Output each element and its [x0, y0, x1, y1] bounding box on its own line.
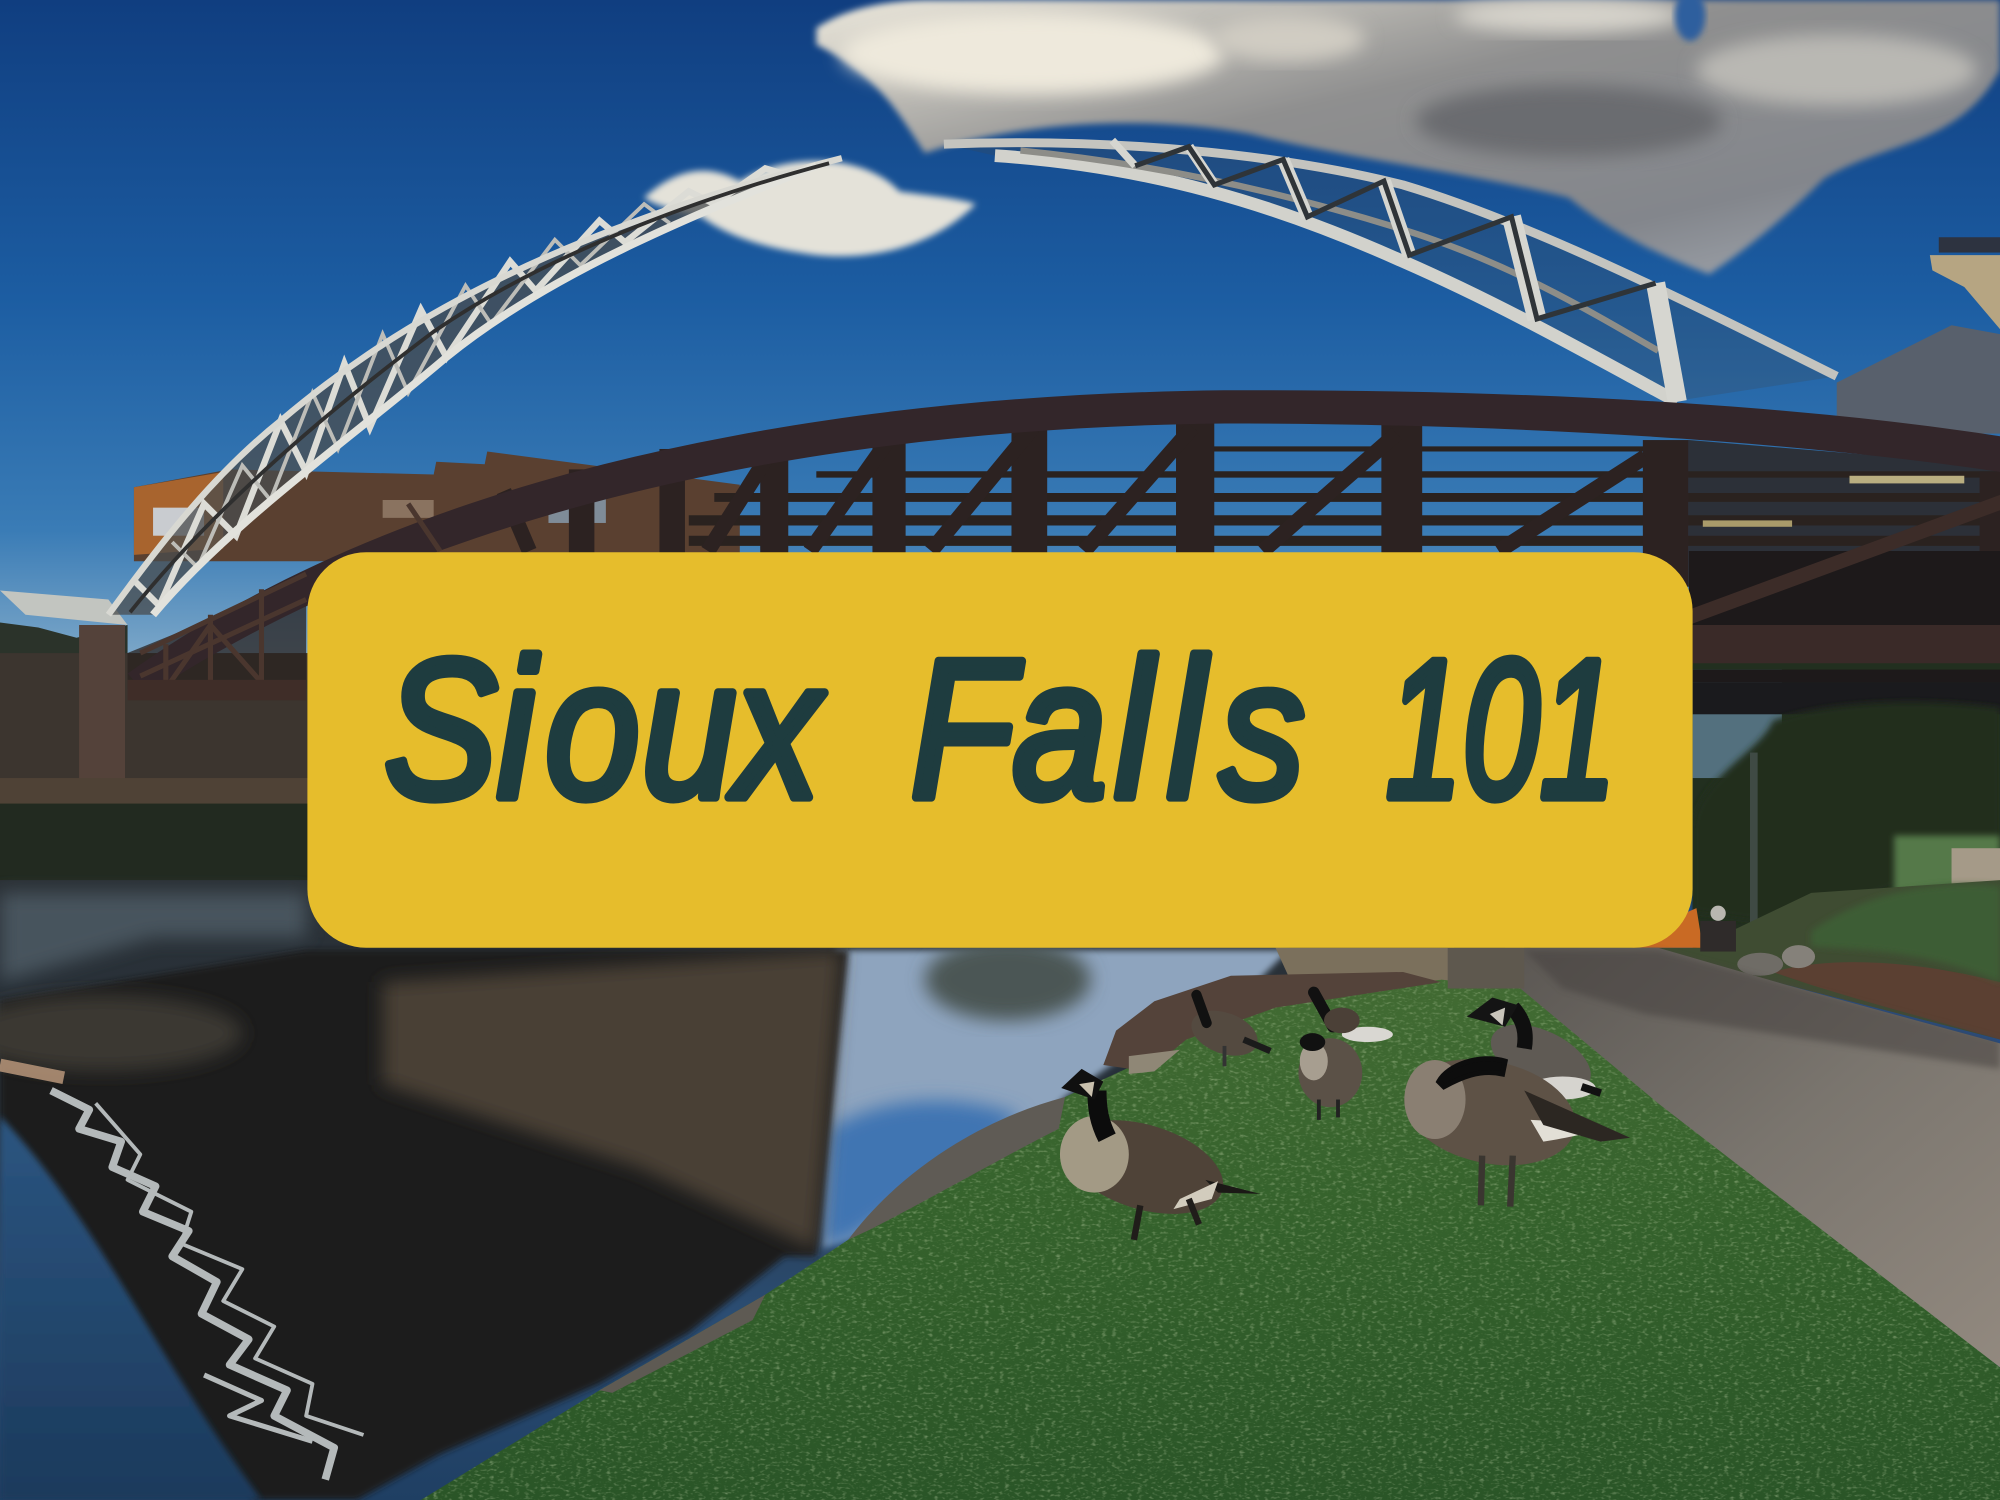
- left truss end: [140, 504, 440, 689]
- sky-facing deck backdrop right: [1689, 440, 2000, 551]
- river water: [0, 880, 1531, 1500]
- title: Sioux Falls: [384, 619, 1305, 840]
- goose: back centre: [1314, 992, 1393, 1042]
- pedestrian truss bridge: [128, 390, 2000, 778]
- goose: rear right: [1467, 997, 1601, 1107]
- title: 101: [1386, 620, 1617, 840]
- shoreline rocks: [599, 972, 1441, 1393]
- goose: foreground left: [1054, 1069, 1260, 1240]
- far bank strip: [1276, 948, 1454, 989]
- title banner: [307, 552, 1693, 948]
- blue water lower left: [0, 1116, 261, 1500]
- truss verticals: [569, 417, 2000, 638]
- dark building reflection: [0, 950, 848, 1500]
- arch reflection: [0, 1065, 364, 1480]
- truss deck stripes: [689, 449, 2000, 541]
- ripple at far left of water: [0, 893, 306, 982]
- steel arch: left span: [108, 158, 842, 615]
- left reflection glow: [0, 995, 242, 1071]
- far reflection trees: [925, 939, 1091, 1020]
- stone abutment left: [0, 580, 319, 893]
- brown reflection panel: [383, 950, 842, 1250]
- building upper right: [1837, 237, 2000, 434]
- paved riverside path: [1505, 948, 2000, 1367]
- bright water near the far bank: [823, 950, 1288, 1247]
- trees on the right bank: [1693, 663, 2000, 969]
- goose: middle: [1298, 1033, 1362, 1120]
- underside on the right: [1689, 551, 2000, 778]
- truss diagonals: [504, 427, 1645, 551]
- buildings behind bridge: [134, 452, 740, 561]
- banner panel: [307, 552, 1693, 948]
- mulch bed and shrubs: [1518, 880, 2000, 1040]
- far stone post: [1448, 948, 1524, 989]
- sky: [0, 0, 2000, 663]
- orange flowers and seated person: [1633, 906, 1736, 952]
- large cloud top right: [816, 0, 2000, 274]
- grass bank: [421, 980, 2000, 1500]
- goose: large right: [1394, 1044, 1630, 1207]
- path shadow: [1524, 950, 2000, 1069]
- steel arch: right span: [944, 140, 1837, 402]
- sky reflection on the water: [823, 1101, 1020, 1247]
- small cloud: [644, 161, 976, 256]
- top chord: [128, 390, 2000, 695]
- goose: back left: [1185, 995, 1270, 1066]
